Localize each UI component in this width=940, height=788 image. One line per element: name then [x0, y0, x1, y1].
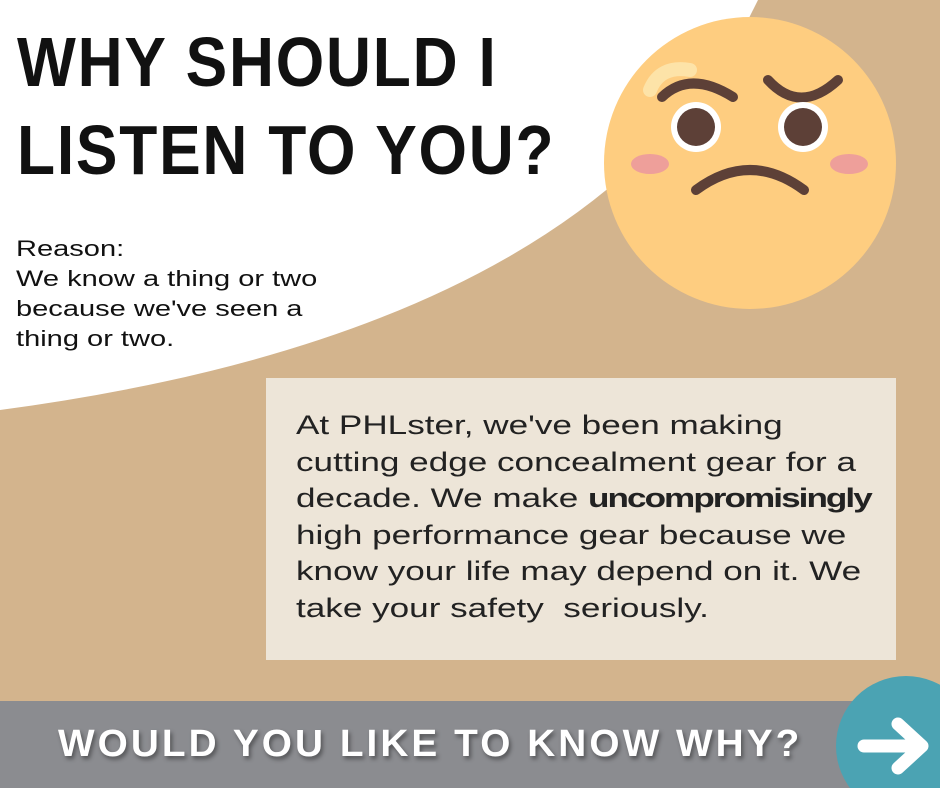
icon: frowning emoji	[604, 17, 896, 309]
icon: arrow circle	[836, 676, 940, 788]
text box: about PHLster: cutting edge concealment gear for a	[296, 446, 856, 476]
bottom bar	[0, 701, 940, 788]
text box: about PHLster: decade. We make uncompromisingly	[296, 483, 871, 513]
text box: about PHLster: At PHLster, we've been making	[296, 410, 783, 440]
text box: about PHLster: know your life may depend on it. We	[296, 556, 861, 586]
call to action text: WOULD YOU LIKE TO KNOW WHY?	[58, 723, 802, 765]
text box: about PHLster: high performance gear because we	[296, 520, 846, 550]
title	[17, 23, 555, 189]
title: WHY SHOULD I	[17, 23, 498, 101]
text box: about PHLster	[266, 378, 896, 660]
reason text	[16, 236, 317, 351]
reason text: We know a thing or two	[16, 266, 317, 291]
reason text: Reason:	[16, 236, 124, 261]
reason text: thing or two.	[16, 326, 174, 351]
reason text: because we've seen a	[16, 296, 302, 321]
text box: about PHLster: take your safety seriously.	[296, 592, 709, 622]
title: LISTEN TO YOU?	[17, 111, 555, 189]
